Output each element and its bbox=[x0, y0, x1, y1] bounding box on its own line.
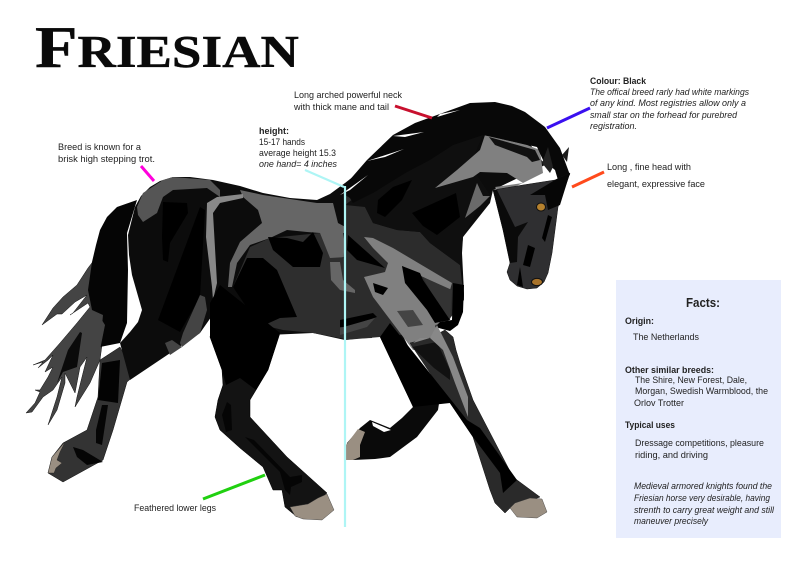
barrel upper band bbox=[228, 190, 360, 287]
text: neck: Long arched powerful neck bbox=[294, 90, 402, 100]
text: height: one hand= 4 inches bbox=[259, 159, 337, 169]
text: colour: of any kind. Most registries allow only a bbox=[590, 98, 746, 108]
text: colour: small star on the forhead for purebred bbox=[590, 110, 738, 120]
facts: similar breeds: Morgan, Swedish Warmblood, the bbox=[635, 386, 768, 396]
hoof: far fore bbox=[345, 429, 365, 460]
text: feathered legs: Feathered lower legs bbox=[134, 503, 216, 513]
neck upper tone bbox=[345, 135, 490, 265]
title: FRIESIAN bbox=[35, 15, 299, 80]
text: head bbox=[607, 162, 705, 189]
shoulder shadow bbox=[233, 258, 297, 327]
girth stripe bbox=[206, 194, 243, 300]
face markings bbox=[493, 190, 528, 263]
facts: similar breeds bbox=[625, 365, 768, 408]
barrel mid tone bbox=[233, 233, 372, 339]
pointer: head bbox=[572, 172, 604, 187]
neck and shoulder highlight bbox=[364, 237, 453, 350]
eye bbox=[536, 203, 546, 211]
facts: typical uses: Typical uses bbox=[625, 420, 675, 430]
pointer: trot bbox=[141, 166, 154, 181]
facts: knights note bbox=[634, 481, 775, 526]
horse head bbox=[493, 147, 570, 289]
horse body and neck bbox=[120, 125, 545, 380]
facts: typical uses: riding, and driving bbox=[635, 450, 708, 460]
neck lower tone bbox=[340, 195, 464, 340]
neck crest highlight bbox=[435, 135, 543, 188]
forelock bbox=[530, 173, 570, 210]
horse illustration bbox=[26, 102, 570, 520]
facts heading: Facts: bbox=[686, 296, 720, 310]
text: head: Long , fine head with bbox=[607, 162, 691, 172]
pointer: colour bbox=[547, 108, 590, 128]
facts: typical uses: Dressage competitions, pleasure bbox=[635, 438, 764, 448]
facts: similar breeds: Other similar breeds: bbox=[625, 365, 714, 375]
horse mane bbox=[340, 102, 570, 203]
facts: origin: Origin: bbox=[625, 316, 654, 326]
facts: origin bbox=[625, 316, 699, 342]
hoof: near hind bbox=[290, 494, 334, 520]
text: colour: The offical breed rarly had white markings bbox=[590, 87, 749, 97]
facts: origin: The Netherlands bbox=[633, 332, 699, 342]
facts: knights note: maneuver precisely bbox=[634, 516, 709, 526]
chest shadow bbox=[210, 285, 280, 370]
text: trot: Breed is known for a bbox=[58, 142, 142, 152]
horse far foreleg bbox=[345, 330, 440, 460]
text: trot: brisk high stepping trot. bbox=[58, 154, 155, 164]
pointer: neck bbox=[395, 106, 432, 118]
hoof: near fore bbox=[510, 498, 547, 518]
text: neck: with thick mane and tail bbox=[293, 102, 389, 112]
croup highlight bbox=[137, 177, 220, 222]
horse far hind leg bbox=[48, 347, 135, 482]
ear bbox=[542, 147, 553, 173]
height line bbox=[305, 170, 345, 527]
facts: knights note: Friesian horse very desirable, having bbox=[634, 493, 771, 503]
text: head: elegant, expressive face bbox=[607, 179, 705, 189]
panel: facts bbox=[616, 280, 781, 538]
horse near foreleg bbox=[380, 323, 547, 518]
rib highlight bbox=[330, 262, 355, 293]
text: colour: registration. bbox=[590, 121, 637, 131]
facts: similar breeds: Orlov Trotter bbox=[634, 398, 684, 408]
text: height bbox=[259, 126, 337, 169]
text: neck bbox=[293, 90, 402, 112]
horse near hind leg bbox=[210, 285, 334, 520]
pointer: feathered legs bbox=[203, 475, 265, 499]
text: height: average height 15.3 bbox=[259, 148, 336, 158]
text: colour bbox=[590, 76, 749, 131]
text: colour: Colour: Black bbox=[590, 76, 647, 86]
text: height: height: bbox=[259, 126, 289, 136]
mane slits bbox=[340, 110, 460, 195]
hindquarter shadows bbox=[162, 202, 188, 262]
horse tail bbox=[26, 200, 137, 425]
facts: knights note: strenth to carry great weight and still bbox=[634, 505, 775, 515]
hoof: far hind bbox=[48, 442, 65, 473]
facts: typical uses bbox=[625, 420, 764, 460]
facts: similar breeds: The Shire, New Forest, Dale, bbox=[635, 375, 747, 385]
text: trot bbox=[58, 142, 155, 164]
text: height: 15-17 hands bbox=[259, 137, 305, 147]
facts: knights note: Medieval armored knights found the bbox=[634, 481, 772, 491]
nostril bbox=[532, 278, 542, 286]
